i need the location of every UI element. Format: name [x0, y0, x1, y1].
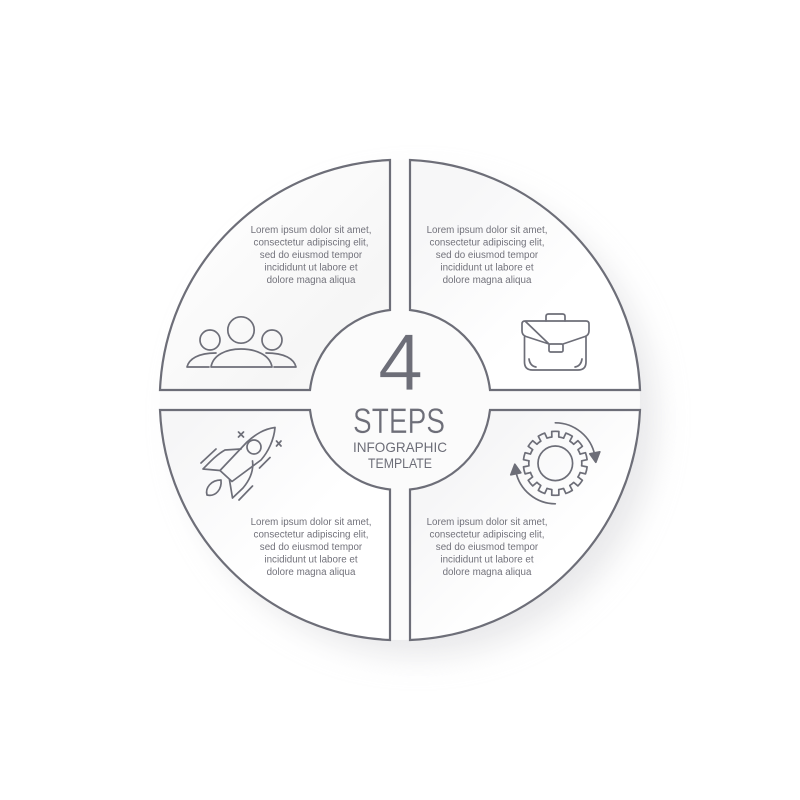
subheading: infographic: INFOGRAPHIC [353, 439, 447, 455]
text: bottom left: Lorem ipsum dolor sit amet, [251, 517, 371, 528]
text: top right: incididunt ut labore et [440, 262, 534, 274]
panel: centre title [353, 318, 447, 471]
text: top left: consectetur adipiscing elit, [254, 238, 368, 248]
text: bottom left: sed do eiusmod tempor [260, 542, 363, 553]
icon: briefcase [522, 314, 589, 370]
heading: steps: STEPS [353, 402, 445, 441]
text: bottom right: sed do eiusmod tempor [436, 542, 539, 553]
text: bottom left: consectetur adipiscing elit, [254, 530, 368, 540]
text: top right: dolore magna aliqua [443, 275, 532, 286]
text: bottom right: incididunt ut labore et [440, 554, 534, 566]
text: top right [427, 225, 547, 286]
panel: bottom left [160, 410, 390, 640]
text: bottom right [427, 517, 547, 578]
text: bottom right: Lorem ipsum dolor sit amet, [427, 517, 547, 528]
text: top left: Lorem ipsum dolor sit amet, [251, 225, 371, 236]
text: top left [251, 225, 371, 286]
text: top right: consectetur adipiscing elit, [430, 238, 544, 248]
panel: top left [160, 160, 390, 390]
icon: rocket [201, 428, 281, 500]
disc backing [160, 160, 640, 640]
text: top right: Lorem ipsum dolor sit amet, [427, 225, 547, 236]
text: bottom left: incididunt ut labore et [264, 554, 358, 566]
icon: gear with arrows [511, 423, 600, 504]
text: top right: sed do eiusmod tempor [436, 250, 539, 261]
number 4: 4 [378, 318, 423, 408]
text: bottom right: dolore magna aliqua [443, 567, 532, 578]
subheading: template: TEMPLATE [368, 456, 432, 471]
text: top left: sed do eiusmod tempor [260, 250, 363, 261]
panel: bottom right [410, 410, 640, 640]
text: top left: dolore magna aliqua [267, 275, 356, 286]
panel: top right [410, 160, 640, 390]
text: bottom left: dolore magna aliqua [267, 567, 356, 578]
text: top left: incididunt ut labore et [264, 262, 358, 274]
text: bottom left [251, 517, 371, 578]
text: bottom right: consectetur adipiscing elit, [430, 530, 544, 540]
icon: people [187, 317, 296, 367]
soft shadow of the circle [180, 180, 656, 656]
